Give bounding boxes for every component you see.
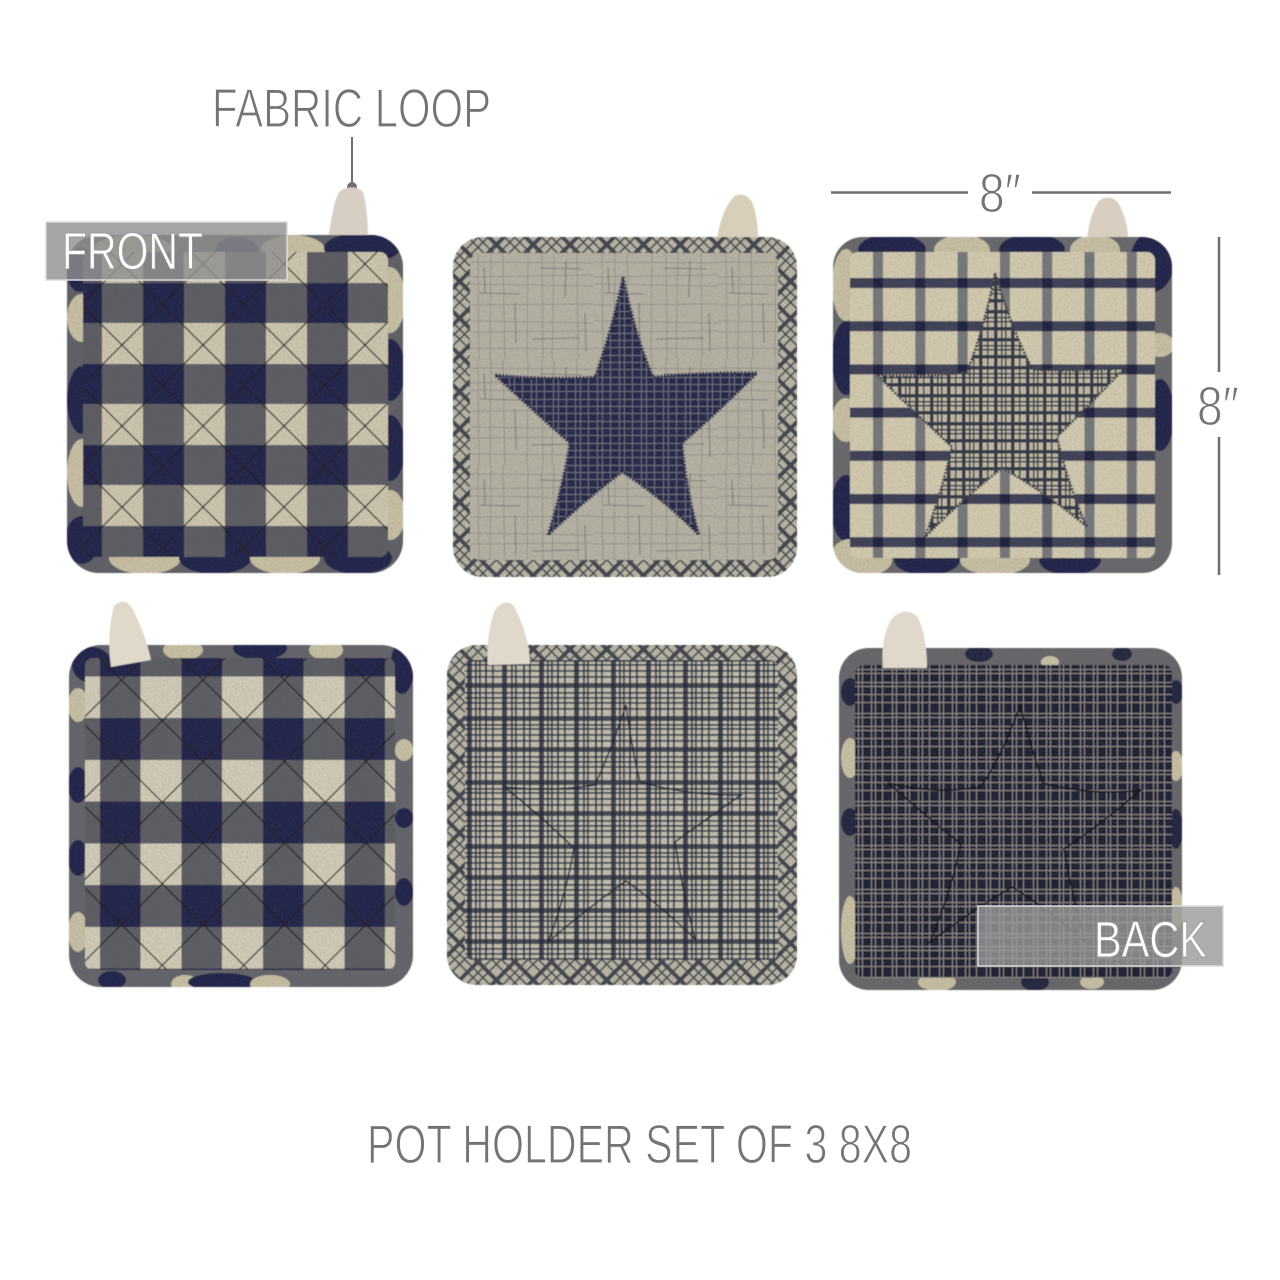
pot holder: front gingham: [65, 187, 405, 574]
dimension: height 8 inches: 8″: [1197, 375, 1239, 437]
pot holder: front star on cream: [453, 195, 797, 577]
badge: back: [978, 906, 1223, 968]
pot holder: back quilted star plaid: [447, 602, 797, 985]
dimension: width 8 inches: 8″: [979, 162, 1021, 224]
pot holder: back dark star plaid: [839, 612, 1183, 991]
title: POT HOLDER SET OF 3 8X8: [367, 1113, 912, 1175]
pot holder: back gingham: [68, 602, 414, 993]
label: fabric loop: [212, 77, 491, 192]
badge: front: FRONT: [62, 223, 203, 281]
pot holder: front star on windowpane: [831, 198, 1174, 575]
label: fabric loop: FABRIC LOOP: [212, 77, 491, 139]
badge: back: BACK: [1094, 911, 1207, 968]
